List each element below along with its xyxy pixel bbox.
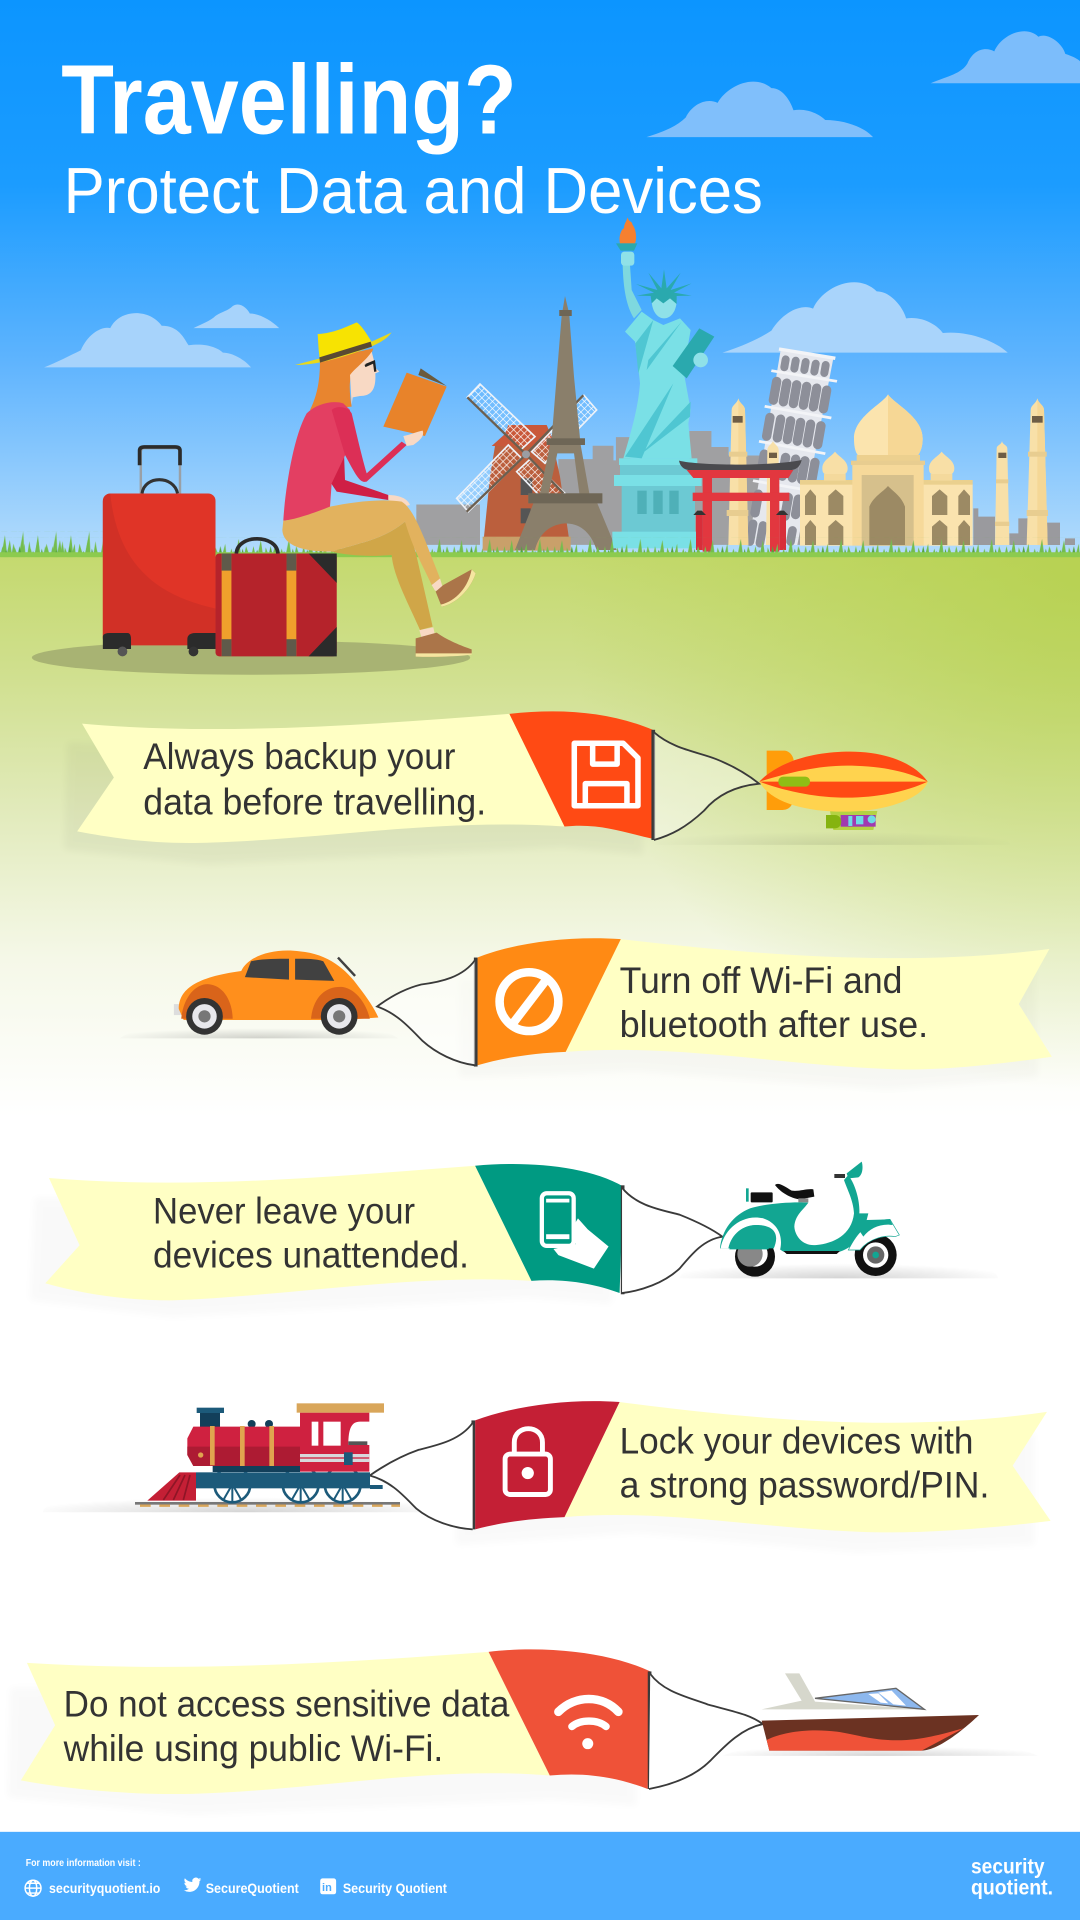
banner text — [620, 960, 928, 1045]
pole — [474, 958, 478, 1067]
wheels — [214, 1466, 361, 1502]
ground shadow — [722, 1739, 1038, 1756]
step 4: lock devices — [43, 1401, 1051, 1553]
seat and box — [775, 1184, 814, 1199]
torso — [283, 402, 350, 521]
banner text: devices unattended. — [153, 1234, 469, 1275]
brand logo — [971, 1855, 1053, 1899]
Statue of Liberty — [612, 217, 714, 548]
grip — [142, 480, 178, 493]
icon: padlock — [505, 1429, 550, 1494]
icon: linkedin — [320, 1878, 336, 1894]
minaret small right — [995, 441, 1009, 545]
wheels — [735, 1237, 775, 1277]
banner text: data before travelling. — [143, 781, 486, 822]
twitter handle: SecureQuotient — [206, 1880, 299, 1896]
ground shadow — [120, 1020, 398, 1038]
back arm — [330, 453, 388, 500]
footer bar — [0, 1832, 1080, 1920]
hand on knee — [388, 495, 410, 507]
ropes — [622, 1188, 722, 1293]
banner text — [143, 736, 486, 822]
raised arm — [623, 265, 642, 318]
icon: linkedin: in — [322, 1882, 332, 1894]
cowcatcher — [147, 1472, 196, 1501]
cab — [300, 1413, 369, 1472]
main block — [852, 465, 924, 546]
ropes — [649, 1674, 763, 1789]
far lower leg — [332, 522, 433, 630]
ground shadow under traveller — [32, 640, 470, 675]
handle — [236, 539, 278, 553]
upper foot — [432, 569, 476, 607]
banner shadow — [459, 967, 1038, 1090]
rail — [135, 1502, 400, 1505]
banner text: Never leave your — [153, 1190, 415, 1231]
banner shadow — [7, 1668, 637, 1815]
mill body — [483, 446, 571, 550]
main dome — [854, 394, 923, 457]
glasses — [365, 362, 375, 372]
minaret behind torii — [766, 441, 779, 545]
ropes — [377, 960, 475, 1065]
pole — [471, 1420, 475, 1529]
banner text: while using public Wi-Fi. — [63, 1728, 443, 1769]
ground shadow — [680, 1251, 998, 1278]
banner body — [564, 1402, 1051, 1532]
icon: twitter — [184, 1878, 201, 1892]
banner text: Always backup your — [143, 736, 456, 777]
minaret left — [727, 398, 748, 545]
boiler — [187, 1427, 300, 1466]
wings — [800, 484, 853, 546]
traveller woman reading — [282, 322, 476, 657]
banner head — [478, 938, 621, 1065]
large red suitcase — [103, 447, 216, 656]
reading hand — [403, 431, 423, 446]
small domes — [822, 452, 954, 481]
icon: orange car — [174, 950, 378, 1035]
banner text — [620, 1420, 989, 1506]
body — [720, 1175, 868, 1252]
wing arches — [805, 489, 970, 545]
banner body — [21, 1652, 550, 1794]
trousers — [282, 500, 440, 585]
pole — [621, 1185, 624, 1294]
small brown-red suitcase — [216, 539, 337, 656]
banner text — [63, 1684, 510, 1769]
headlight — [847, 1162, 863, 1178]
torii gate — [679, 460, 802, 552]
website: securityquotient.io — [49, 1880, 161, 1896]
cloud small — [193, 305, 279, 328]
mill roof — [492, 425, 554, 447]
banner head — [475, 1401, 620, 1529]
step 5: avoid public wi-fi — [7, 1649, 1038, 1815]
icon: speed boat — [762, 1673, 979, 1751]
icon: floppy disk — [574, 743, 638, 806]
banner text — [153, 1190, 469, 1275]
cloud right — [722, 282, 1008, 353]
banner text: bluetooth after use. — [620, 1004, 928, 1045]
mill sails — [457, 384, 597, 512]
pedestal — [612, 458, 702, 548]
banner text: Lock your devices with — [620, 1420, 973, 1461]
ground shadow — [43, 1485, 447, 1512]
step 3: never leave devices unattended — [29, 1162, 998, 1318]
icon: hand holding phone — [542, 1193, 609, 1269]
telescopic handle — [141, 448, 180, 495]
banner body — [45, 1166, 531, 1300]
pole — [651, 730, 655, 840]
banner shadow — [456, 1433, 1035, 1553]
wheels — [103, 633, 216, 649]
crown — [636, 269, 692, 304]
front fender — [848, 1219, 899, 1250]
main arch — [869, 486, 905, 545]
Leaning Tower of Pisa — [745, 347, 837, 548]
icon: steam train — [135, 1403, 400, 1506]
hat — [295, 322, 392, 365]
ropes — [370, 1423, 473, 1529]
torch flame — [620, 217, 636, 243]
banner shadow — [29, 1180, 612, 1318]
banner head — [509, 711, 653, 839]
roof — [297, 1403, 384, 1413]
icon: blimp — [759, 751, 928, 830]
city skyline — [416, 431, 808, 545]
grass strip — [0, 531, 1080, 557]
lower foot — [416, 627, 472, 657]
brand logo: quotient. — [971, 1876, 1053, 1899]
tablet — [673, 328, 714, 378]
title — [61, 44, 763, 227]
right skyline — [973, 508, 1075, 545]
chassis — [213, 1466, 300, 1472]
cloud top right — [931, 31, 1080, 83]
front arm — [332, 407, 407, 482]
banner body — [77, 714, 564, 843]
banner text: a strong password/PIN. — [620, 1465, 989, 1506]
ground shadow — [655, 820, 1010, 845]
background sky — [0, 0, 1080, 557]
footer prompt: For more information visit : — [26, 1858, 141, 1869]
pole — [648, 1671, 651, 1789]
icon: no entry — [500, 972, 558, 1031]
icon: globe — [25, 1880, 41, 1896]
title line one: Travelling? — [61, 44, 517, 154]
hair — [310, 348, 373, 410]
icon: wi-fi — [558, 1699, 618, 1749]
banner body — [566, 939, 1052, 1070]
banner text: Do not access sensitive data — [64, 1684, 510, 1725]
title line two: Protect Data and Devices — [64, 154, 763, 227]
shell — [103, 493, 216, 645]
face — [350, 352, 379, 405]
brand logo: security — [971, 1855, 1045, 1878]
robe — [623, 312, 692, 458]
icon: scooter — [720, 1162, 899, 1277]
cloud left — [44, 313, 251, 367]
windmill — [457, 384, 597, 551]
Taj Mahal — [727, 394, 1075, 546]
minaret right — [1027, 398, 1048, 545]
ropes — [654, 732, 759, 840]
banner shadow — [64, 730, 643, 864]
background ground fade — [0, 553, 1080, 1117]
linkedin name: Security Quotient — [343, 1880, 447, 1896]
chimney — [200, 1413, 220, 1427]
banner text: Turn off Wi-Fi and — [620, 960, 902, 1001]
banner head — [489, 1649, 650, 1789]
cloud top centre — [647, 82, 873, 137]
step 2: turn off wi-fi and bluetooth — [120, 938, 1052, 1090]
Eiffel tower — [515, 296, 617, 550]
torch — [616, 243, 637, 251]
book — [418, 368, 447, 386]
head — [652, 296, 677, 318]
step 1: backup data — [64, 711, 1010, 864]
banner head — [475, 1164, 623, 1293]
